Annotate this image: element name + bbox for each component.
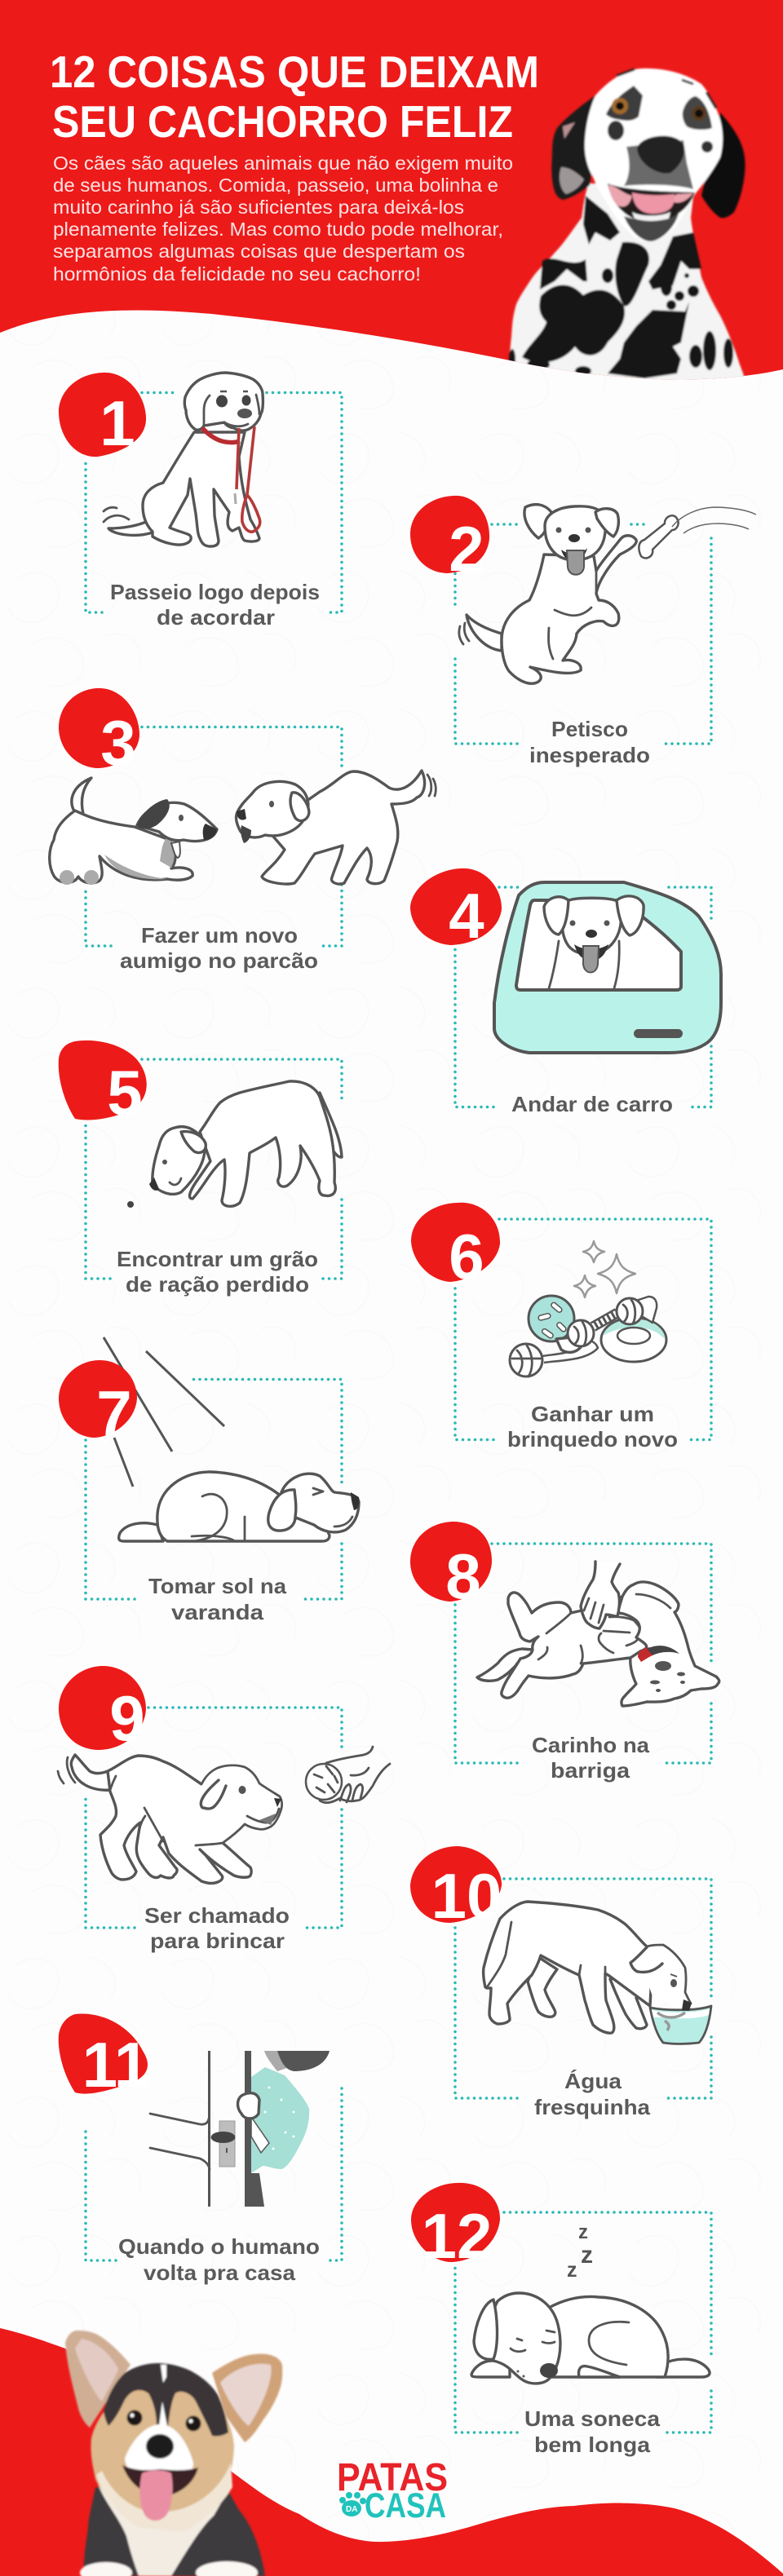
panel 6	[411, 1203, 711, 1451]
logo	[337, 2456, 448, 2525]
frame	[455, 524, 711, 744]
illustration: sleeping dog	[471, 2293, 710, 2384]
sleeping z letters: z	[578, 2221, 588, 2243]
caption: volta pra casa	[144, 2260, 296, 2285]
caption: Andar de carro	[511, 1092, 673, 1116]
badge 9	[59, 1666, 146, 1754]
panel 12	[411, 2183, 711, 2457]
badge 12: 12	[422, 2200, 492, 2272]
illustration: dog in car door	[494, 882, 721, 1053]
badge 1	[59, 373, 146, 459]
frame	[455, 1879, 711, 2098]
caption: aumigo no parcão	[120, 948, 318, 973]
sleeping z letters: z	[581, 2242, 593, 2269]
panel 11	[59, 2013, 342, 2285]
badge 12	[411, 2183, 500, 2272]
caption	[532, 1733, 650, 1783]
caption: Fazer um novo	[141, 923, 298, 948]
frame	[86, 1059, 342, 1279]
badge 6	[411, 1203, 500, 1292]
badge 3	[59, 688, 139, 779]
badge 4	[410, 868, 502, 952]
caption: Encontrar um grão	[117, 1247, 318, 1271]
sleeping z letters: z	[567, 2259, 577, 2282]
caption: fresquinha	[534, 2095, 651, 2119]
intro text: muito carinho já são suficientes para deixá-los	[53, 197, 464, 218]
badge 3: 3	[100, 707, 136, 779]
caption: Passeio logo depois	[110, 580, 320, 604]
illustration: dog sniffing kibble	[127, 1081, 342, 1208]
sleeping z letters	[567, 2221, 593, 2282]
caption	[117, 1247, 318, 1297]
badge 8	[410, 1522, 492, 1612]
caption: barriga	[551, 1758, 630, 1783]
badge 6: 6	[449, 1221, 484, 1292]
caption: Ganhar um	[531, 1402, 654, 1426]
intro text: separamos algumas coisas que despertam os	[53, 241, 465, 262]
panel 1	[59, 373, 342, 630]
header banner	[0, 0, 783, 391]
photo: corgi puppy	[65, 2331, 282, 2576]
caption: Carinho na	[532, 1733, 650, 1757]
frame	[455, 2212, 711, 2432]
panel 3	[50, 688, 436, 973]
intro text	[53, 152, 513, 285]
caption: Petisco	[551, 717, 628, 741]
title: 12 COISAS QUE DEIXAM	[50, 46, 539, 97]
caption	[529, 717, 650, 767]
frame	[86, 393, 342, 612]
title: SEU CACHORRO FELIZ	[52, 96, 513, 147]
title	[50, 46, 539, 147]
caption: Uma soneca	[524, 2406, 661, 2431]
illustration: human at the door	[150, 2051, 330, 2207]
panel 9	[58, 1666, 390, 1953]
caption: Tomar sol na	[148, 1574, 287, 1598]
caption	[144, 1903, 290, 1953]
badge 5: 5	[107, 1057, 143, 1129]
panel 4	[410, 868, 721, 1116]
logo: CASA	[365, 2486, 446, 2525]
logo: PATAS	[337, 2456, 448, 2499]
illustration: dog with leash	[104, 373, 263, 546]
caption	[148, 1574, 287, 1624]
badge 9: 9	[109, 1682, 145, 1754]
badge 11	[59, 2013, 149, 2101]
caption: Água	[564, 2069, 622, 2093]
intro text: plenamente felizes. Mas como tudo pode melhorar,	[53, 219, 503, 240]
caption	[110, 580, 320, 630]
illustration: dog drinking water	[484, 1902, 711, 2044]
illustration: belly rub	[477, 1562, 719, 1706]
icon: paw: DA	[346, 2505, 357, 2514]
illustration: toys and sparkles	[510, 1241, 666, 1376]
badge 7	[59, 1360, 137, 1449]
frame	[86, 2088, 342, 2260]
footer banner	[0, 2328, 783, 2576]
badge 8: 8	[445, 1540, 481, 1612]
caption: de ração perdido	[126, 1272, 309, 1297]
badge 11: 11	[82, 2029, 149, 2101]
frame	[455, 1544, 711, 1763]
caption	[120, 923, 318, 973]
badge 2: 2	[449, 513, 484, 585]
photo: dalmatian	[507, 68, 749, 391]
illustration: two dogs meeting	[50, 771, 436, 885]
caption	[534, 2069, 651, 2119]
badge 4: 4	[449, 880, 484, 952]
caption: brinquedo novo	[507, 1427, 678, 1451]
frame	[455, 1219, 711, 1440]
caption: varanda	[171, 1600, 264, 1624]
caption: de acordar	[157, 605, 275, 630]
intro text: Os cães são aqueles animais que não exigem muito	[53, 152, 513, 174]
caption: bem longa	[534, 2432, 651, 2457]
caption: Quando o humano	[118, 2234, 320, 2259]
badge 1: 1	[100, 387, 135, 459]
intro text: de seus humanos. Comida, passeio, uma bolinha e	[53, 175, 498, 196]
badge 5	[59, 1041, 147, 1129]
caption	[507, 1402, 678, 1451]
frame	[86, 1708, 342, 1928]
badge 10: 10	[431, 1860, 502, 1932]
badge 2	[410, 496, 489, 585]
frame	[86, 1380, 342, 1599]
panel 2	[410, 496, 756, 767]
illustration: dog called to play	[58, 1747, 390, 1883]
panel 8	[410, 1522, 719, 1783]
frame	[86, 727, 342, 946]
caption: para brincar	[150, 1929, 285, 1953]
panel 7	[59, 1337, 360, 1624]
caption	[524, 2406, 661, 2457]
caption: inesperado	[529, 743, 650, 767]
caption	[118, 2234, 320, 2285]
sun rays	[104, 1337, 224, 1487]
badge 7: 7	[96, 1377, 132, 1449]
panel 10	[410, 1846, 711, 2119]
caption: Ser chamado	[144, 1903, 290, 1928]
intro text: hormônios da felicidade no seu cachorro!	[53, 263, 421, 285]
illustration: dog jumping for bone	[459, 505, 756, 683]
badge 10	[410, 1846, 502, 1932]
frame	[455, 887, 711, 1107]
panel 5	[59, 1041, 342, 1297]
illustration: dog lying in sun	[119, 1472, 360, 1541]
